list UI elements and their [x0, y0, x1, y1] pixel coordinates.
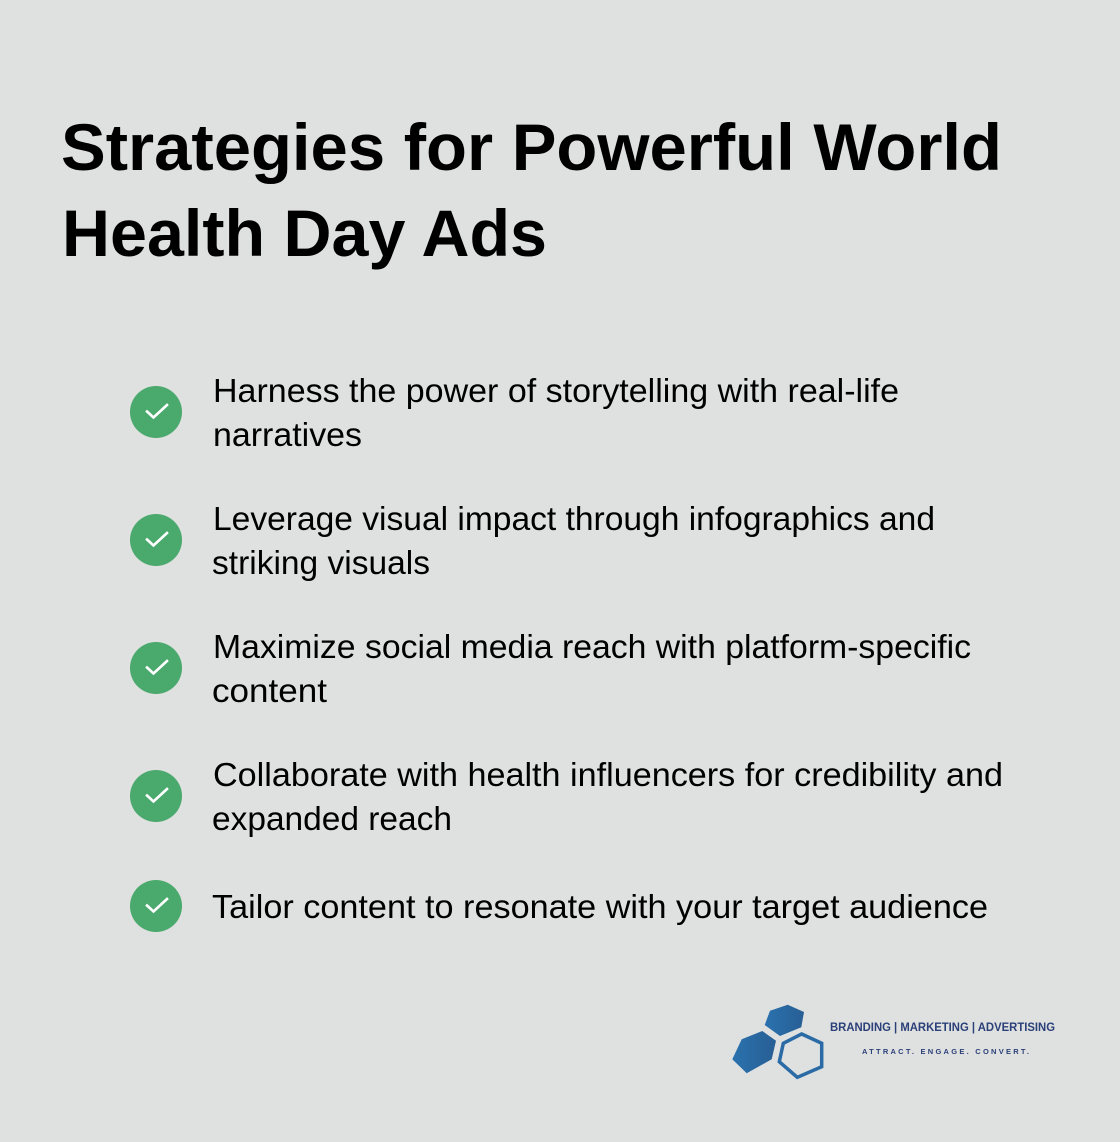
icon: check 4 — [130, 770, 182, 822]
item 1 text: narratives — [213, 416, 362, 453]
item 3 — [130, 628, 971, 709]
item 2 text — [212, 500, 935, 581]
logo — [732, 1005, 1055, 1077]
logo text: BRANDING | MARKETING | ADVERTISING — [830, 1022, 1055, 1034]
item 5 — [130, 880, 988, 932]
item 1 — [130, 372, 899, 453]
item 4 text: Collaborate with health influencers for credibility and — [213, 756, 1003, 793]
item 4 text: expanded reach — [212, 800, 452, 837]
title — [61, 110, 1002, 270]
icon: check 5 — [130, 880, 182, 932]
item 2 text: Leverage visual impact through infographics and — [213, 500, 935, 537]
title: Health Day Ads — [62, 196, 547, 270]
icon: check 3 — [130, 642, 182, 694]
item 1 text — [213, 372, 899, 453]
item 3 text — [212, 628, 971, 709]
logo text — [830, 1022, 1055, 1056]
item 4 — [130, 756, 1003, 837]
item 3 text: content — [212, 672, 327, 709]
item 2 text: striking visuals — [212, 544, 430, 581]
item 2 — [130, 500, 935, 581]
checklist — [130, 372, 1003, 932]
icon: check 1 — [130, 386, 182, 438]
icon: check 2 — [130, 514, 182, 566]
item 3 text: Maximize social media reach with platform-specific — [213, 628, 971, 665]
logo text: ATTRACT. ENGAGE. CONVERT. — [862, 1047, 1029, 1056]
item 5 text: Tailor content to resonate with your target audience — [212, 888, 988, 925]
item 1 text: Harness the power of storytelling with real-life — [213, 372, 899, 409]
title: Strategies for Powerful World — [61, 110, 1002, 184]
item 4 text — [212, 756, 1003, 837]
icon: hexagons — [732, 1005, 822, 1077]
